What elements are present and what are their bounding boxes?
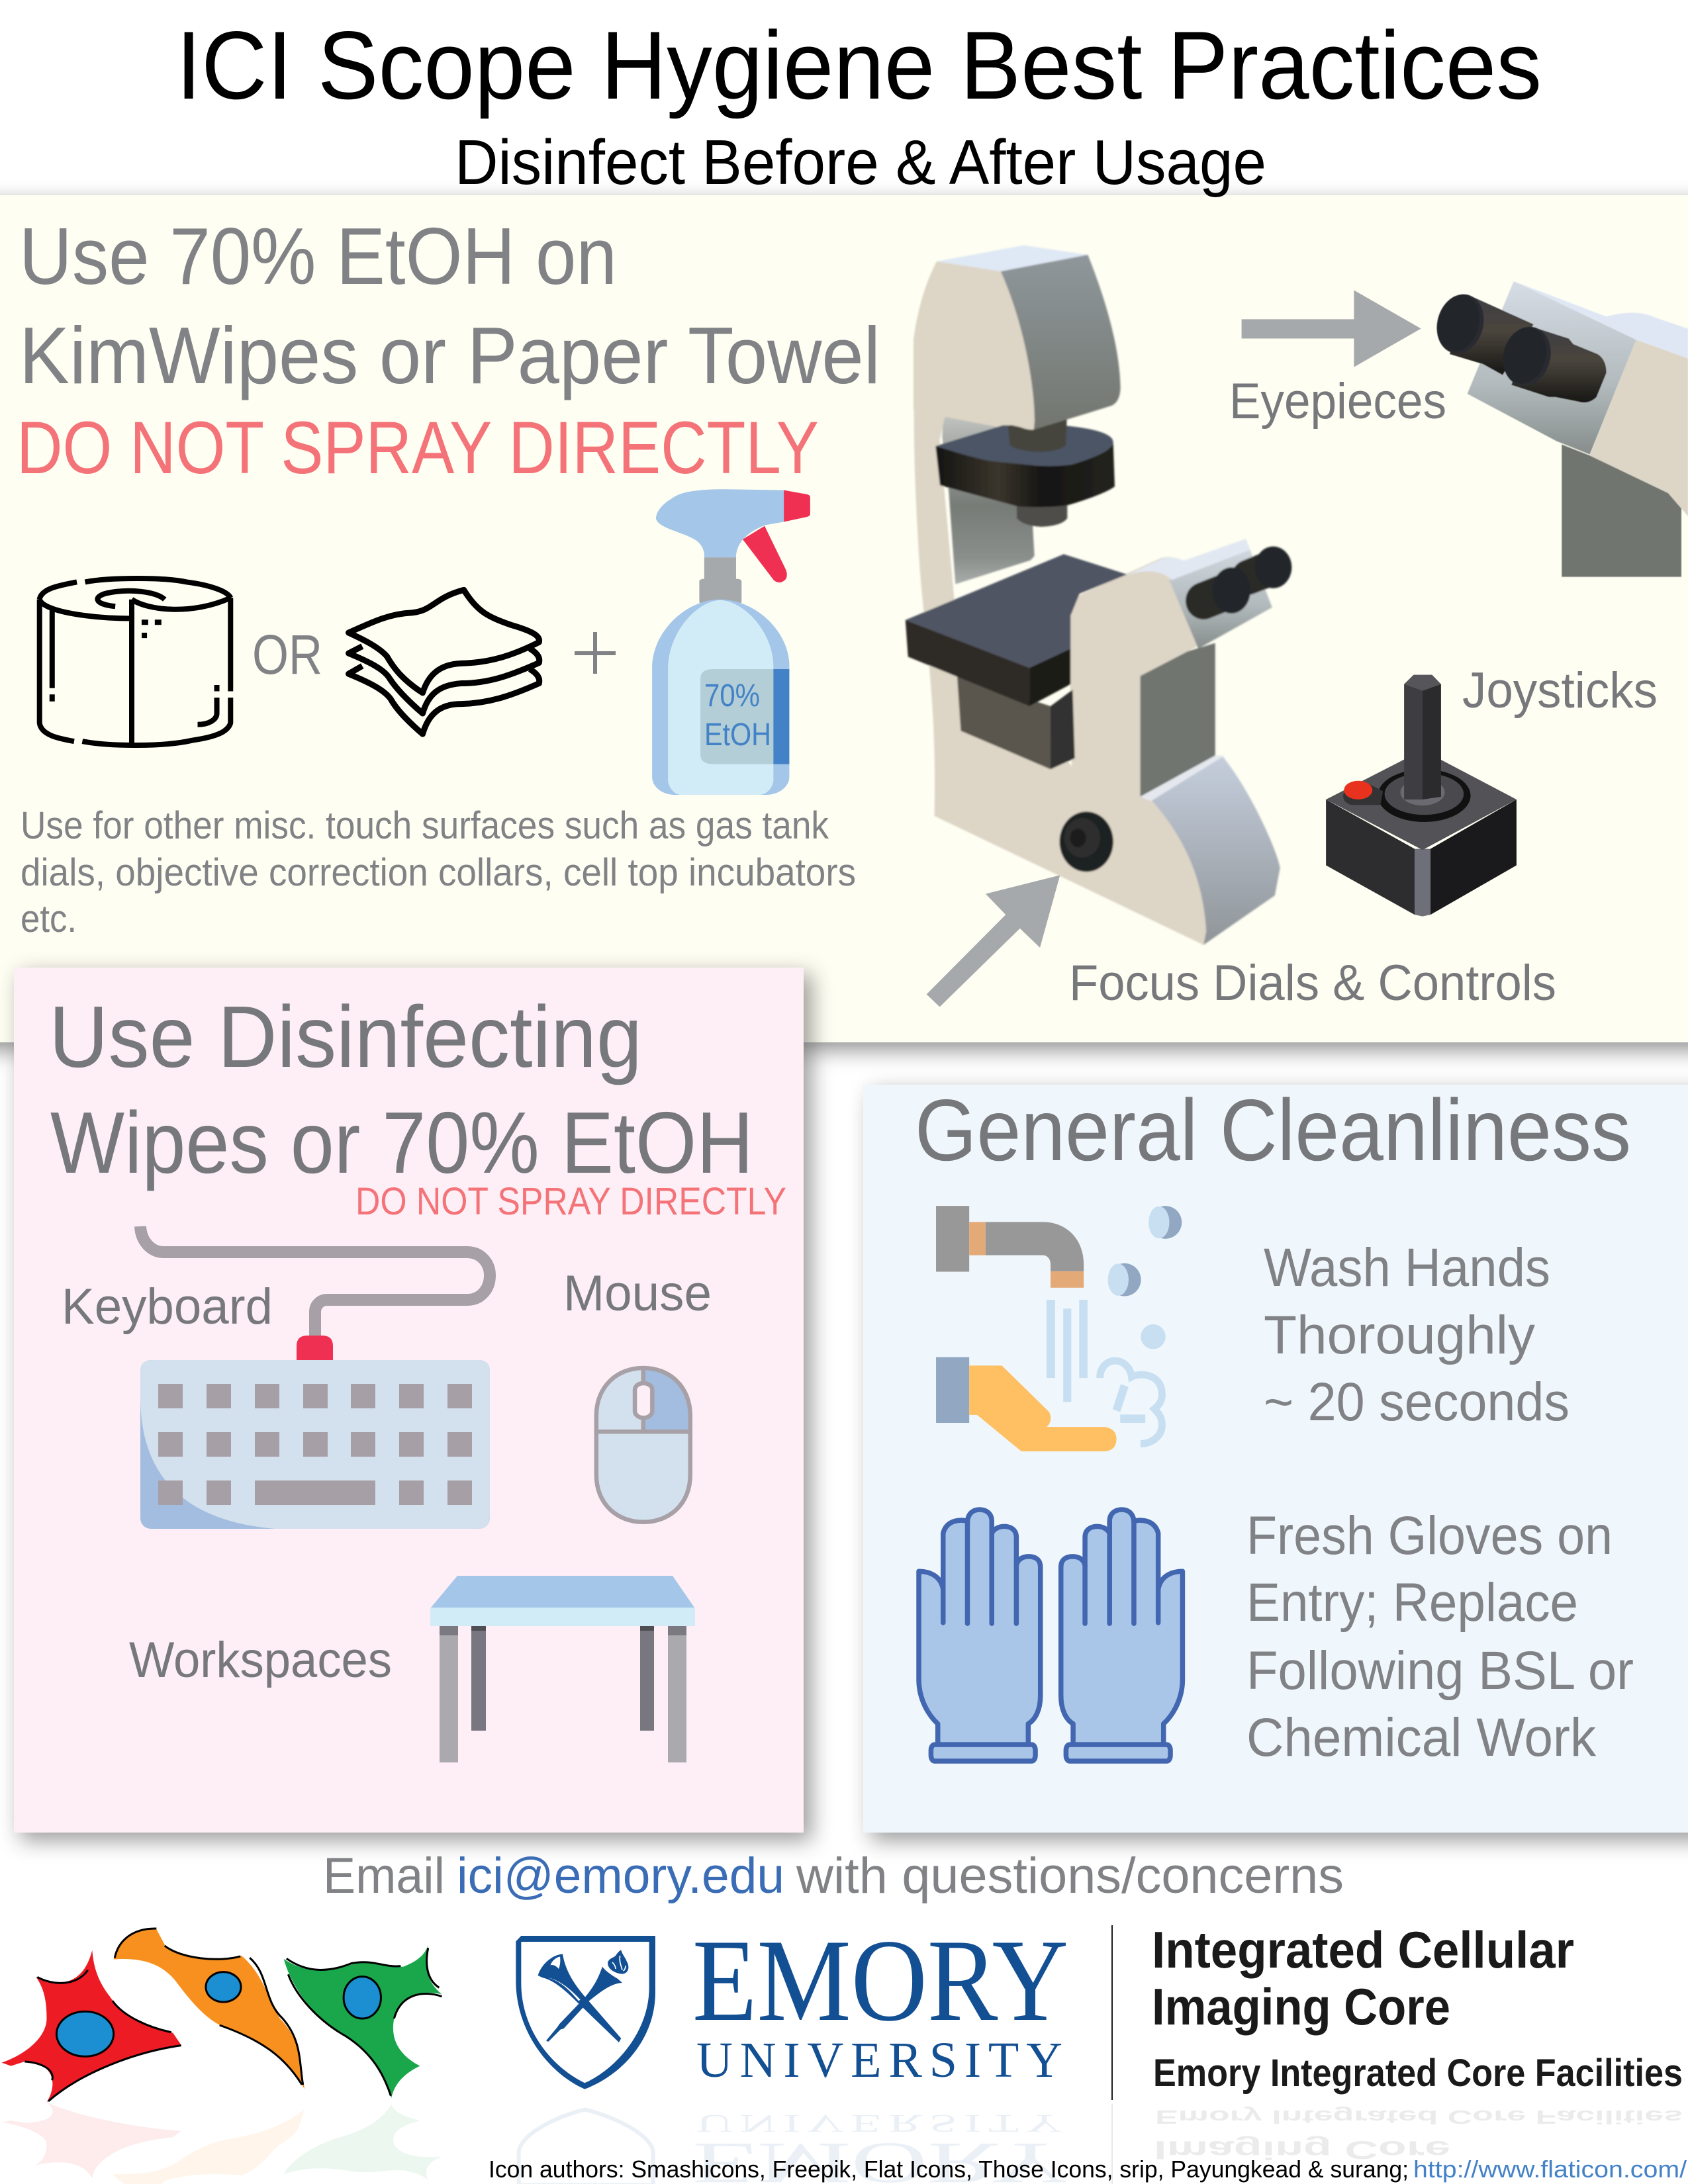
icon: mouse [596, 1368, 690, 1522]
heading: use 70% EtOH: KimWipes or Paper Towel [19, 310, 880, 400]
logo: Emory shield [516, 1936, 655, 2089]
text: fresh gloves [1246, 1506, 1634, 1768]
text: other touch surfaces: etc. [21, 897, 77, 940]
icon: spray bottle: 70% [704, 678, 760, 713]
text: icon credits: Icon authors: Smashicons, Freepik, Flat Icons, Those Icons, srip, Payungkead & surang; [489, 2156, 1409, 2183]
logo: Emory University wordmark: EMORY [692, 1915, 1068, 2046]
text: fresh gloves: Following BSL or [1246, 1641, 1634, 1701]
logo: Emory University wordmark [692, 1915, 1068, 2088]
cell: red [1, 1950, 181, 2103]
icon: spray bottle [652, 489, 810, 795]
icon: spray bottle: EtOH [704, 717, 771, 752]
logo reflections [1, 2103, 1683, 2184]
heading: use disinfecting wipes: Wipes or 70% EtOH [50, 1094, 753, 1191]
icon: stacked wipes [349, 590, 539, 734]
text: fresh gloves: Chemical Work [1246, 1707, 1597, 1768]
icon: plus sign [575, 632, 616, 674]
illustration: microscope [906, 246, 1291, 945]
title: ICI Scope Hygiene Best Practices [176, 11, 1542, 119]
arrow: to focus dials [927, 875, 1060, 1007]
text: fresh gloves: Entry; Replace [1246, 1572, 1578, 1633]
heading: use 70% EtOH [19, 211, 880, 400]
warning: do not spray directly: DO NOT SPRAY DIRECTLY [17, 406, 819, 489]
divider: logo separator [1111, 1925, 1113, 2100]
heading: use disinfecting wipes [49, 988, 753, 1191]
label: workspaces: Workspaces [129, 1632, 392, 1688]
icon: keyboard [140, 1226, 490, 1529]
logo: integrated cellular imaging core: Integrated Cellular [1152, 1921, 1574, 1979]
label: focus dials and controls: Focus Dials & Controls [1069, 955, 1556, 1011]
subtitle: Disinfect Before & After Usage [455, 127, 1266, 198]
label: joysticks: Joysticks [1462, 662, 1658, 719]
text: OR: OR [252, 623, 322, 686]
label: eyepieces: Eyepieces [1229, 373, 1446, 430]
text: icon credits: http://www.flaticon.com/ [1413, 2156, 1687, 2183]
icon: paper towel roll [40, 578, 230, 745]
icon: gloves [919, 1510, 1182, 1761]
cell: orange [114, 1929, 305, 2089]
label: mouse: Mouse [563, 1265, 712, 1322]
text: contact email: ici@emory.edu [457, 1848, 784, 1904]
text: fresh gloves: Fresh Gloves on [1246, 1506, 1613, 1566]
text: contact email [323, 1848, 1344, 1904]
text: contact email: with questions/concerns [796, 1848, 1344, 1904]
text: other touch surfaces: Use for other misc. touch surfaces such as gas tank [21, 804, 829, 847]
panel: EtOH on wipes and microscope [0, 195, 1688, 1050]
heading: use 70% EtOH: Use 70% EtOH on [19, 211, 617, 301]
text: wash hands: Wash Hands [1264, 1238, 1550, 1298]
panel: general cleanliness [863, 1081, 1688, 1841]
logo: integrated cellular imaging core: Imaging Core [1152, 1978, 1450, 2036]
text: other touch surfaces: dials, objective correction collars, cell top incubators [21, 851, 856, 894]
icon: washing hands [936, 1206, 1182, 1451]
panel: disinfecting wipes [14, 968, 812, 1841]
logo: Emory University wordmark: UNIVERSITY [696, 2032, 1062, 2088]
text: wash hands [1264, 1238, 1570, 1432]
heading: use disinfecting wipes: Use Disinfecting [49, 988, 642, 1085]
text: wash hands: Thoroughly [1264, 1305, 1535, 1365]
icon: joystick [1326, 675, 1517, 917]
logo reflections: Imaging Core [1154, 2136, 1450, 2164]
heading: general cleanliness: General Cleanliness [915, 1081, 1631, 1179]
illustration: eyepieces inset [1430, 281, 1688, 577]
logo: integrated cellular imaging core [1152, 1921, 1683, 2095]
logo reflections: UNIVERSITY [696, 2110, 1062, 2138]
logo: ICI cells [1, 1929, 442, 2103]
text: wash hands: ~ 20 seconds [1264, 1372, 1570, 1432]
cell: green [284, 1944, 442, 2098]
text: contact email: Email [323, 1848, 445, 1904]
label: keyboard: Keyboard [62, 1279, 273, 1335]
arrow: to eyepieces [1242, 290, 1421, 367]
text: other touch surfaces [21, 804, 856, 940]
icon: table [430, 1576, 695, 1762]
warning: do not spray directly: DO NOT SPRAY DIRECTLY [355, 1180, 786, 1223]
